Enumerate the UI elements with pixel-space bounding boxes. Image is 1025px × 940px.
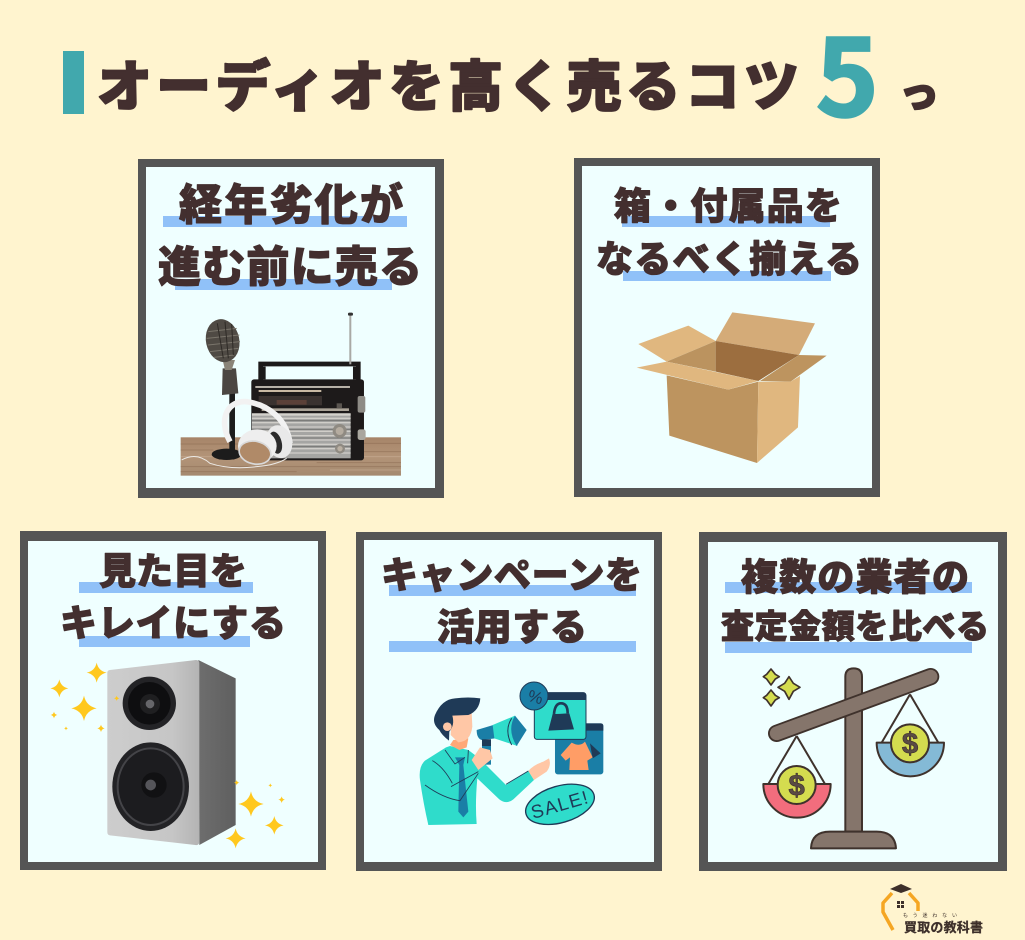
man	[420, 697, 550, 825]
heading: 複数の業者の	[741, 547, 969, 601]
sale badge	[521, 777, 599, 832]
heading	[158, 171, 422, 295]
left pan	[763, 766, 831, 818]
heading: なるべく揃える	[596, 229, 862, 283]
sparkles	[763, 669, 800, 706]
percent sign: %	[526, 686, 545, 708]
heading	[60, 541, 286, 647]
logo	[883, 884, 983, 935]
panel: sell before aging	[138, 159, 444, 498]
bag card	[520, 682, 586, 739]
panel: compare quotes	[699, 532, 1007, 871]
title suffix: っ	[899, 61, 939, 119]
icon: balance scale with coins	[763, 668, 944, 848]
right pan: $	[902, 728, 918, 761]
icon: cardboard box	[637, 312, 827, 463]
logo window	[897, 901, 904, 908]
sparkles	[50, 663, 285, 848]
icon: speaker with sparkles	[50, 660, 285, 848]
logo house outline	[883, 893, 918, 930]
icon: man with megaphone and sale items	[420, 682, 603, 832]
heading: 箱・付属品を	[614, 176, 842, 230]
heading	[721, 547, 989, 648]
logo tagline: もう迷わない	[903, 912, 957, 919]
panel: clean appearance	[20, 531, 326, 870]
heading: キャンペーンを	[381, 545, 642, 599]
title	[63, 0, 939, 147]
heading: 進む前に売る	[158, 233, 422, 295]
heading: 経年劣化が	[179, 171, 403, 233]
heading highlights	[725, 582, 972, 653]
heading highlights	[622, 216, 831, 281]
left pan: $	[789, 769, 805, 802]
heading: キレイにする	[60, 593, 286, 647]
heading highlights	[389, 585, 636, 652]
sale badge: SALE!	[529, 786, 592, 823]
megaphone	[472, 716, 527, 770]
icon: microphone, radio and headphones	[181, 313, 401, 476]
logo graduation cap	[890, 884, 912, 893]
title accent bar	[63, 51, 84, 114]
title text: オーディオを高く売るコツ	[97, 42, 799, 122]
right pan	[877, 724, 944, 776]
panel: keep box and accessories	[574, 158, 880, 497]
heading: 見た目を	[99, 541, 247, 595]
heading highlights	[79, 582, 253, 647]
heading	[381, 545, 642, 651]
panel: use campaigns	[356, 532, 662, 871]
shirt card	[555, 723, 603, 774]
heading	[596, 176, 862, 283]
heading highlights	[163, 216, 407, 290]
logo name: 買取の教科書	[904, 920, 983, 935]
heading: 活用する	[437, 597, 587, 651]
heading: 査定金額を比べる	[721, 600, 989, 648]
